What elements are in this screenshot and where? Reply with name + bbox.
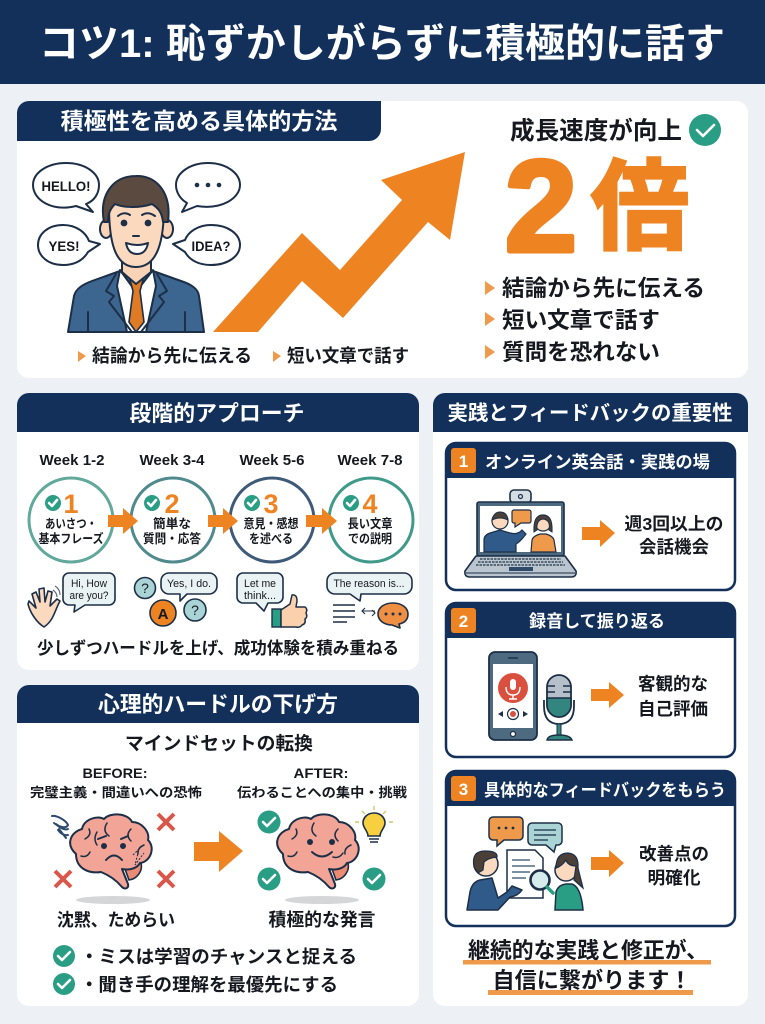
card 3: get feedback: 3 bbox=[459, 780, 468, 799]
step 4 circle: 長い文章 bbox=[348, 516, 392, 531]
title banner: コツ1: 恥ずかしがらずに積極的に話す bbox=[39, 22, 725, 66]
big number: 2x bbox=[505, 133, 689, 279]
panel heading: methods bbox=[17, 101, 381, 141]
card 2: record and review: 2 bbox=[459, 612, 468, 631]
icon: let me think with thumbs up bbox=[237, 573, 307, 627]
list: three tips: 短い文章で話す bbox=[502, 308, 660, 333]
step 4 circle bbox=[329, 478, 413, 562]
label: active speech: 積極的な発言 bbox=[268, 910, 376, 930]
speech bubble: YES: YES! bbox=[48, 238, 80, 254]
week labels: Week 5-6 bbox=[240, 453, 304, 469]
card 3: get feedback bbox=[446, 771, 735, 926]
list: three tips: 結論から先に伝える bbox=[502, 276, 705, 301]
card 1: online lessons: 1 bbox=[459, 452, 468, 471]
step 4 circle: 4 bbox=[362, 489, 378, 519]
card 3: get feedback: 具体的なフィードバックをもらう bbox=[484, 780, 726, 800]
heading: growth speed: 成長速度が向上 bbox=[510, 116, 682, 145]
closing message bbox=[463, 938, 711, 995]
arrow: step 1 to 2 bbox=[108, 508, 138, 534]
icon: let me think with thumbs up: think... bbox=[244, 590, 276, 602]
arrow: to improvements bbox=[591, 850, 624, 877]
step 3 circle: 意見・感想 bbox=[244, 516, 299, 531]
closing message: 自信に繋がります！ bbox=[492, 968, 692, 993]
week labels: Week 3-4 bbox=[140, 453, 204, 469]
panel heading: stepwise: 段階的アプローチ bbox=[130, 401, 304, 426]
step 2 circle bbox=[131, 478, 215, 562]
step 3 circle bbox=[230, 478, 314, 562]
checklist: ・聞き手の理解を最優先にする bbox=[80, 974, 338, 995]
step 2 circle: 2 bbox=[164, 489, 180, 519]
icon: three check badges bbox=[258, 810, 386, 890]
speech bubble: IDEA: IDEA? bbox=[192, 238, 230, 254]
arrow: to conversation frequency bbox=[582, 520, 615, 547]
big number: 2x: 2 bbox=[505, 133, 577, 279]
arrow: step 3 to 4 bbox=[306, 508, 337, 534]
bullet: short sentences: 短い文章で話す bbox=[287, 346, 409, 366]
step 3 circle: を述べる bbox=[249, 531, 293, 546]
card 2: record and review: 録音して振り返る bbox=[529, 611, 665, 631]
step 3 circle: 3 bbox=[263, 489, 279, 519]
week labels bbox=[40, 453, 402, 469]
illustration: happy brain bbox=[277, 814, 359, 904]
text: objective evaluation bbox=[638, 674, 708, 719]
panel heading: practice: 実践とフィードバックの重要性 bbox=[448, 402, 732, 425]
title banner bbox=[0, 0, 765, 84]
arrow: to self evaluation bbox=[591, 682, 624, 708]
illustration: worried brain bbox=[70, 814, 152, 904]
text: clarify improvements bbox=[639, 844, 709, 888]
heading: growth speed bbox=[510, 114, 721, 146]
step 1 circle: 基本フレーズ bbox=[38, 531, 104, 546]
checklist: ・ミスは学習のチャンスと捉える bbox=[80, 946, 357, 967]
icon: long explanation bbox=[327, 573, 412, 628]
panel: stepwise approach bbox=[17, 393, 419, 670]
panel: lowering psychological hurdles bbox=[17, 685, 419, 1006]
icon: waving hand with bubble: Hi, How bbox=[71, 578, 107, 590]
icon: question and answer bubbles: A bbox=[158, 606, 169, 623]
step 1 circle bbox=[29, 478, 113, 562]
before text bbox=[30, 765, 202, 800]
icon: waving hand with bubble: are you? bbox=[70, 590, 108, 602]
panel: concrete methods bbox=[17, 101, 748, 378]
after text: 伝わることへの集中・挑戦 bbox=[237, 785, 407, 800]
text: objective evaluation: 客観的な bbox=[638, 674, 708, 694]
text: clarify improvements: 明確化 bbox=[648, 868, 701, 888]
icon: waving hand with bubble bbox=[28, 573, 115, 627]
icon: question and answer bubbles: Yes, I do. bbox=[167, 578, 211, 590]
speech bubble: YES bbox=[38, 225, 100, 265]
panel heading: psychology bbox=[17, 685, 419, 723]
panel heading: psychology: 心理的ハードルの下げ方 bbox=[98, 692, 338, 717]
week labels: Week 1-2 bbox=[40, 453, 104, 469]
step 1 circle: あいさつ・ bbox=[45, 517, 97, 531]
card 2: record and review bbox=[446, 603, 735, 757]
illustration: smiling businessman bbox=[68, 176, 204, 332]
after text bbox=[237, 765, 407, 800]
caption: stepwise summary: 少しずつハードルを上げ、成功体験を積み重ねる bbox=[37, 638, 399, 658]
list: three tips bbox=[485, 276, 705, 365]
big number: 2x: 倍 bbox=[591, 152, 689, 262]
before text: BEFORE: bbox=[82, 765, 148, 781]
subheading: mindset shift: マインドセットの転換 bbox=[125, 733, 313, 754]
step 2 circle: 簡単な bbox=[153, 516, 191, 531]
step 1 circle: 1 bbox=[63, 489, 79, 519]
text: three times weekly: 会話機会 bbox=[639, 537, 709, 557]
icon: question and answer bubbles: ? bbox=[141, 580, 149, 596]
speech bubble: HELLO bbox=[33, 163, 99, 212]
panel heading: practice bbox=[433, 393, 748, 432]
card 1: online lessons bbox=[446, 443, 735, 590]
text: three times weekly bbox=[624, 514, 724, 557]
icon: long explanation: The reason is... bbox=[334, 578, 404, 590]
text: clarify improvements: 改善点の bbox=[639, 844, 709, 864]
icon: question and answer bubbles bbox=[134, 573, 217, 626]
step 4 circle: での説明 bbox=[348, 531, 392, 546]
panel heading: methods: 積極性を高める具体的方法 bbox=[60, 108, 338, 134]
text: three times weekly: 週3回以上の bbox=[624, 514, 724, 534]
icon: dizzy spiral bbox=[52, 816, 68, 838]
speech bubble: HELLO: HELLO! bbox=[42, 178, 90, 194]
panel heading: stepwise bbox=[17, 393, 419, 432]
checklist bbox=[53, 945, 357, 995]
icon: let me think with thumbs up: Let me bbox=[244, 578, 276, 590]
text: objective evaluation: 自己評価 bbox=[638, 699, 708, 719]
card 1: online lessons: オンライン英会話・実践の場 bbox=[485, 452, 710, 472]
bullet: conclusion first: 結論から先に伝える bbox=[92, 346, 252, 366]
illustration: feedback meeting bbox=[467, 817, 583, 910]
panel: practice and feedback bbox=[433, 393, 748, 1006]
before text: 完璧主義・間違いへの恐怖 bbox=[30, 785, 202, 800]
arrow: before to after bbox=[194, 831, 243, 872]
icon: rising orange arrow bbox=[213, 152, 465, 332]
list: three tips: 質問を恐れない bbox=[502, 340, 660, 365]
speech bubble: dots bbox=[176, 163, 240, 212]
arrow: step 2 to 3 bbox=[208, 508, 238, 534]
step 2 circle: 質問・応答 bbox=[143, 531, 201, 546]
icon: x marks bbox=[55, 814, 174, 887]
icon: smartphone recorder bbox=[489, 652, 537, 740]
icon: microphone bbox=[544, 675, 574, 740]
after text: AFTER: bbox=[294, 765, 348, 781]
label: silence: 沈黙、ためらい bbox=[57, 910, 175, 930]
speech bubble: IDEA bbox=[173, 225, 240, 265]
week labels: Week 7-8 bbox=[338, 453, 402, 469]
icon: check badge bbox=[689, 114, 721, 146]
closing message: 継続的な実践と修正が、 bbox=[468, 938, 708, 963]
icon: laptop video call bbox=[465, 490, 576, 577]
icon: question and answer bubbles: ? bbox=[191, 602, 199, 618]
icon: light bulb bbox=[355, 806, 393, 842]
